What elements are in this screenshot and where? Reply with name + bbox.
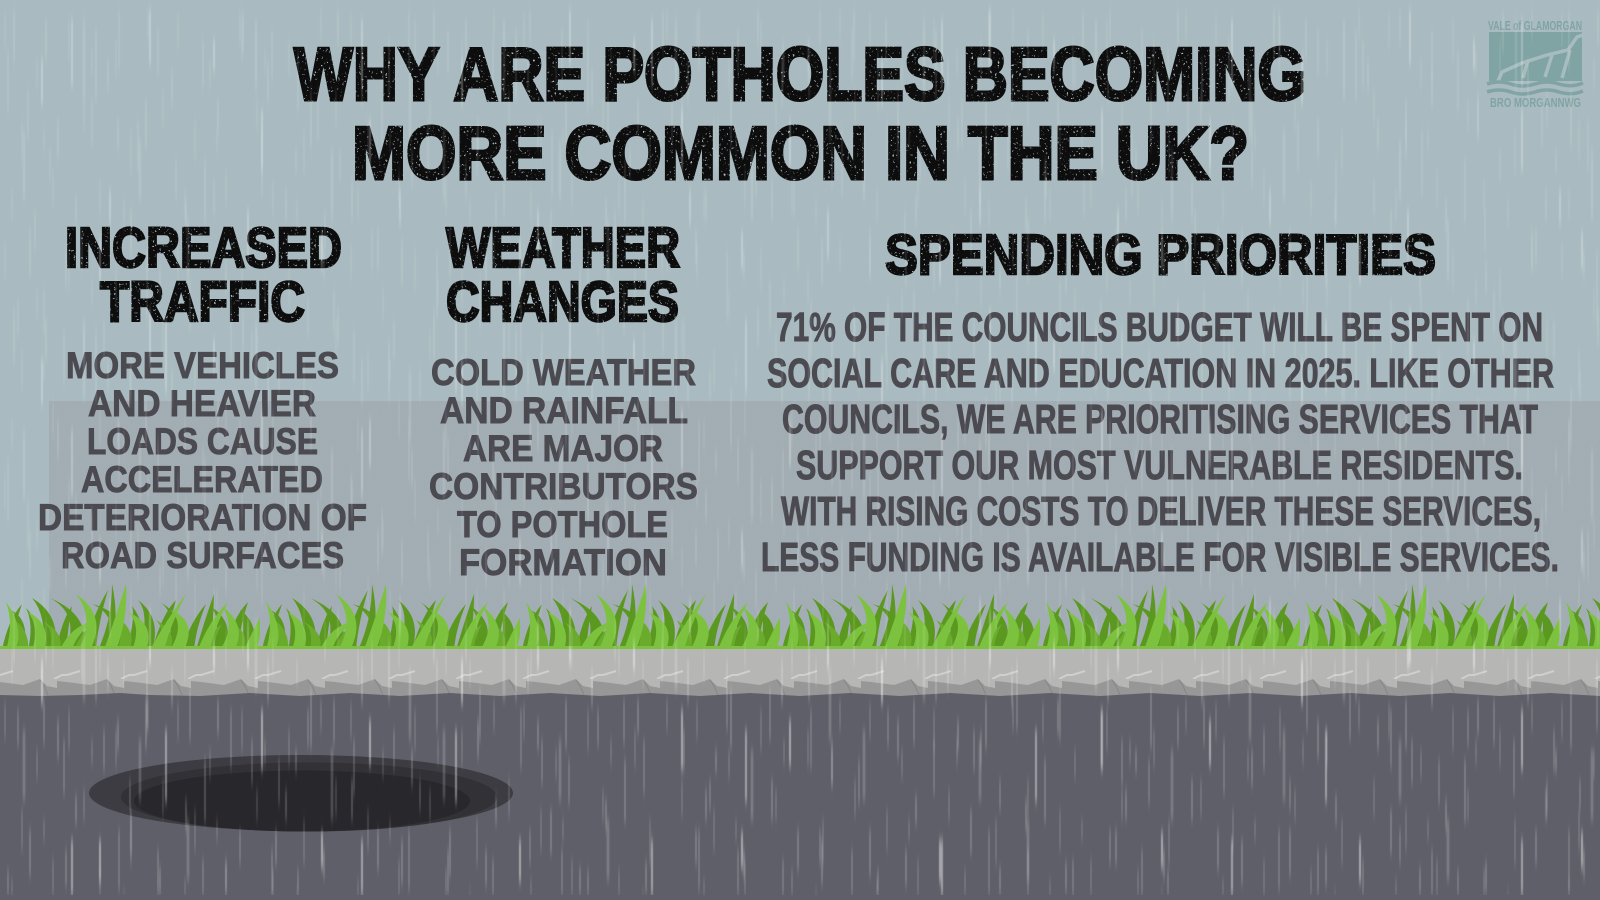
heading: weather changes: WEATHER bbox=[446, 216, 680, 280]
title bbox=[294, 32, 1306, 195]
text: weather changes explanation: ARE MAJOR bbox=[463, 428, 663, 469]
heading: increased traffic bbox=[65, 216, 342, 334]
title: MORE COMMON IN THE UK? bbox=[352, 111, 1249, 195]
text: weather changes explanation bbox=[429, 352, 698, 583]
text: increased traffic explanation: DETERIORATION OF bbox=[38, 497, 367, 538]
pothole bbox=[89, 755, 513, 832]
text: increased traffic explanation: MORE VEHICLES bbox=[66, 345, 339, 386]
logo: Vale of Glamorgan bbox=[1487, 18, 1583, 110]
pavement kerb bbox=[0, 649, 1600, 700]
road surface bbox=[0, 693, 1600, 900]
panel: increased traffic bbox=[38, 216, 367, 576]
heading: increased traffic: TRAFFIC bbox=[100, 270, 305, 334]
text: weather changes explanation: FORMATION bbox=[459, 542, 667, 583]
heading: spending priorities: SPENDING PRIORITIES bbox=[885, 223, 1436, 287]
text: increased traffic explanation bbox=[38, 345, 367, 576]
text: increased traffic explanation: ACCELERATED bbox=[81, 459, 323, 500]
text: increased traffic explanation: LOADS CAUSE bbox=[87, 421, 318, 462]
panel: weather changes bbox=[429, 216, 698, 583]
text: increased traffic explanation: AND HEAVIER bbox=[88, 383, 316, 424]
text: spending priorities explanation bbox=[761, 304, 1559, 580]
text: weather changes explanation: COLD WEATHER bbox=[431, 352, 696, 393]
heading: increased traffic: INCREASED bbox=[65, 216, 342, 280]
panel: spending priorities bbox=[761, 223, 1559, 580]
title: WHY ARE POTHOLES BECOMING bbox=[294, 32, 1306, 116]
sky background bbox=[0, 0, 1600, 660]
text: weather changes explanation: AND RAINFALL bbox=[440, 390, 688, 431]
text: weather changes explanation: TO POTHOLE bbox=[457, 504, 668, 545]
heading: weather changes bbox=[446, 216, 680, 334]
text: increased traffic explanation: ROAD SURFACES bbox=[61, 535, 344, 576]
text: weather changes explanation: CONTRIBUTORS bbox=[429, 466, 698, 507]
heading: weather changes: CHANGES bbox=[446, 270, 679, 334]
grass strip bbox=[0, 580, 1600, 650]
textured backdrop band bbox=[49, 401, 1600, 650]
